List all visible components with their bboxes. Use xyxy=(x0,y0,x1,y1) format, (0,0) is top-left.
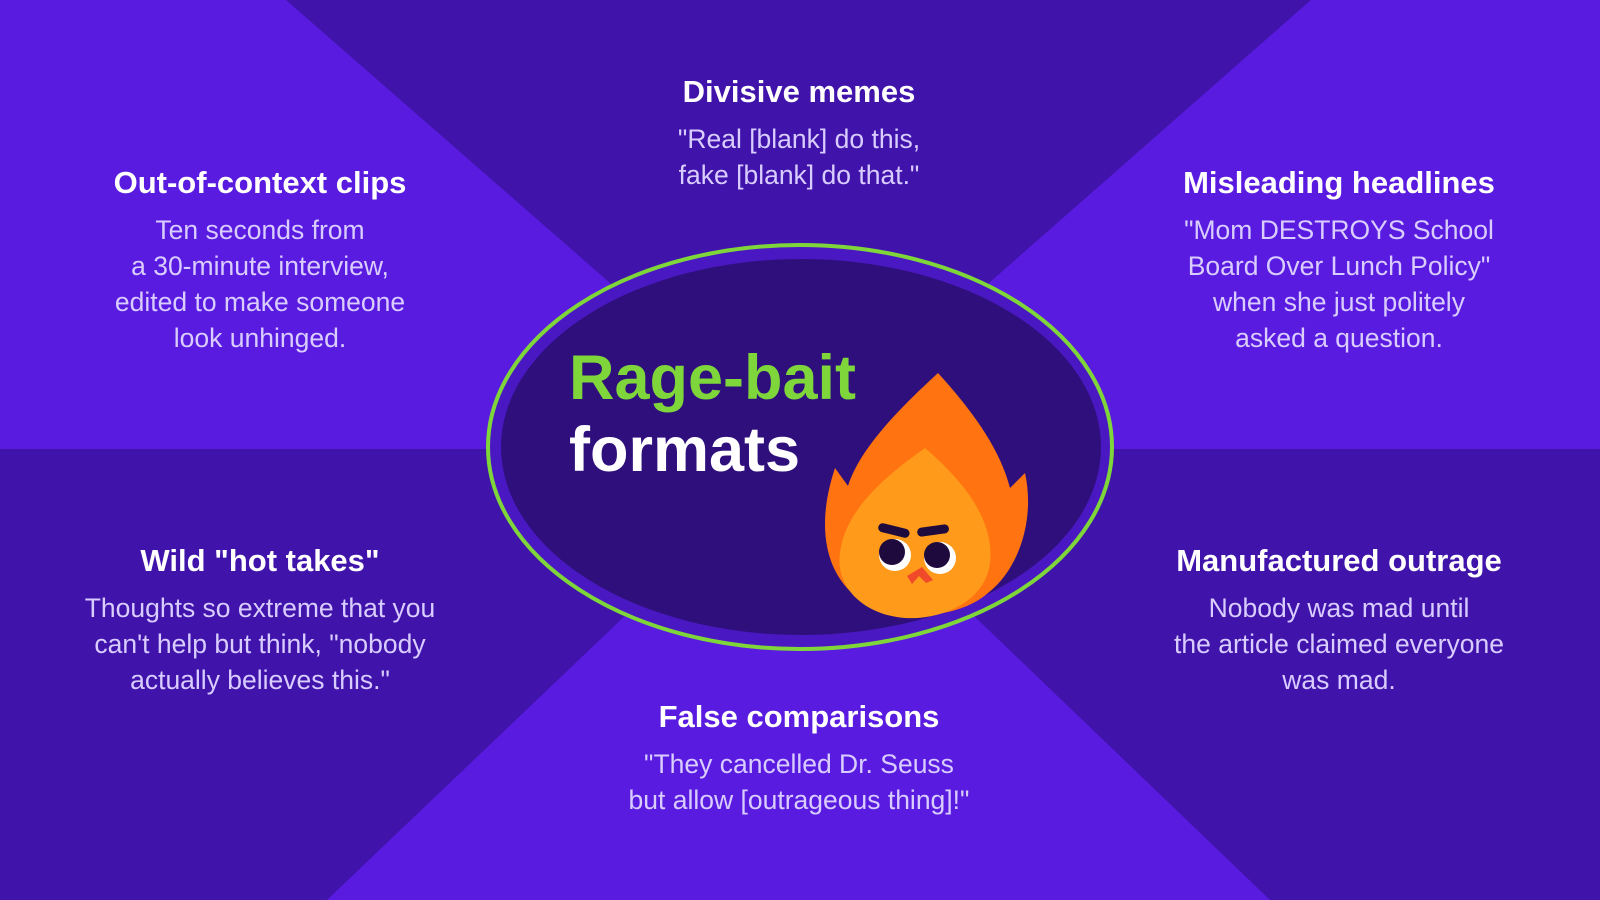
text: manufactured outrage: the article claimed everyone xyxy=(1174,629,1504,659)
title xyxy=(569,343,856,485)
text: out-of-context clips: Ten seconds from xyxy=(155,215,365,245)
text: false comparisons: but allow [outrageous thing]!" xyxy=(629,785,969,815)
text: manufactured outrage: was mad. xyxy=(1282,665,1396,695)
text: misleading headlines: asked a question. xyxy=(1235,323,1443,353)
icon: angry flame xyxy=(825,373,1028,618)
title: Rage-bait xyxy=(569,343,856,413)
text: wild hot takes: Wild "hot takes" xyxy=(140,543,380,578)
text: divisive memes: fake [blank] do that." xyxy=(679,160,919,190)
text: misleading headlines: "Mom DESTROYS School xyxy=(1184,215,1494,245)
text: misleading headlines: Board Over Lunch Policy" xyxy=(1188,251,1490,281)
text: divisive memes xyxy=(678,74,920,190)
text: wild hot takes xyxy=(85,543,435,695)
text: out-of-context clips: edited to make someone xyxy=(115,287,405,317)
text: wild hot takes: actually believes this." xyxy=(130,665,390,695)
text: misleading headlines: Misleading headlines xyxy=(1183,165,1495,200)
text: false comparisons: False comparisons xyxy=(659,699,939,734)
text: divisive memes: "Real [blank] do this, xyxy=(678,124,920,154)
text: out-of-context clips: a 30-minute interview, xyxy=(131,251,389,281)
text: manufactured outrage: Manufactured outrage xyxy=(1176,543,1502,578)
text: wild hot takes: can't help but think, "nobody xyxy=(94,629,426,659)
text: out-of-context clips: Out-of-context clips xyxy=(114,165,406,200)
text: wild hot takes: Thoughts so extreme that you xyxy=(85,593,435,623)
title: formats xyxy=(569,415,800,485)
text: manufactured outrage: Nobody was mad until xyxy=(1209,593,1469,623)
text: out-of-context clips xyxy=(114,165,406,353)
text: manufactured outrage xyxy=(1174,543,1504,695)
text: out-of-context clips: look unhinged. xyxy=(174,323,346,353)
text: divisive memes: Divisive memes xyxy=(683,74,915,109)
text: false comparisons: "They cancelled Dr. Seuss xyxy=(644,749,954,779)
text: misleading headlines xyxy=(1183,165,1495,353)
text: false comparisons xyxy=(629,699,969,815)
text: misleading headlines: when she just politely xyxy=(1213,287,1465,317)
